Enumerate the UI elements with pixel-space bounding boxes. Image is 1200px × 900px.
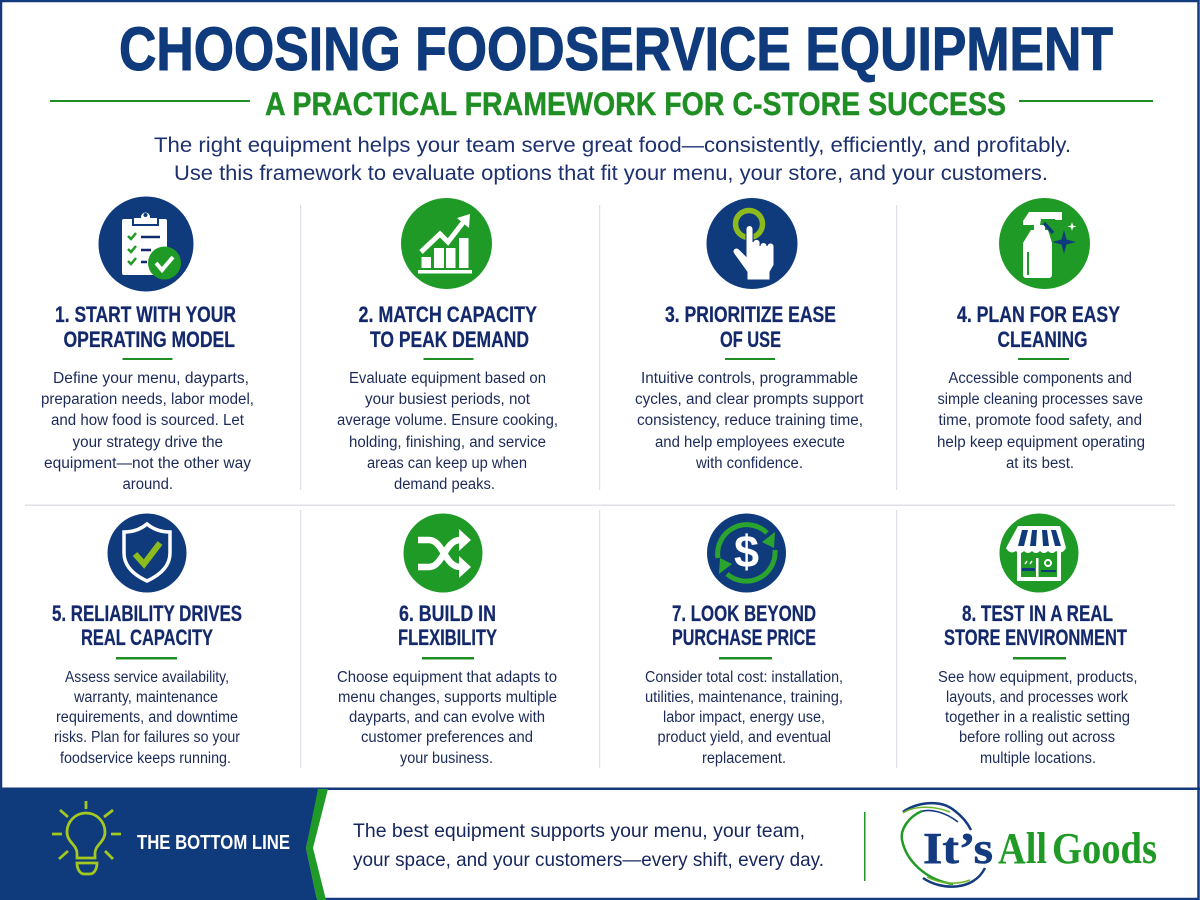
body text: requirements, and downtime	[56, 709, 238, 726]
heading: 3. PRIORITIZE EASE	[665, 302, 836, 327]
body text: replacement.	[702, 750, 786, 767]
body text: your strategy drive the	[72, 434, 223, 451]
panel: step 6	[337, 514, 557, 767]
panel: step 4	[937, 198, 1145, 472]
heading: 1. START WITH YOUR	[55, 302, 236, 327]
heading: PURCHASE PRICE	[672, 625, 816, 650]
heading: 6. BUILD IN	[399, 601, 496, 626]
panel: step 2	[337, 198, 558, 493]
icon: storefront	[1000, 514, 1078, 592]
body text: layouts, and processes work	[946, 689, 1128, 706]
body text	[635, 370, 864, 472]
logo: It’s	[923, 824, 993, 873]
icon: spray bottle	[999, 198, 1090, 289]
intro text: The right equipment helps your team serve great food—consistently, efficiently, and profitably.	[154, 133, 1071, 157]
body text: Assess service availability,	[65, 669, 229, 686]
body text: simple cleaning processes save	[938, 391, 1143, 408]
icon: dollar cycle: $	[734, 526, 759, 577]
heading: REAL CAPACITY	[81, 625, 213, 650]
body text: demand peaks.	[394, 476, 495, 493]
subtitle with side rules: A PRACTICAL FRAMEWORK FOR C-STORE SUCCESS	[265, 86, 1006, 122]
body text: and help employees execute	[655, 434, 845, 451]
icon: touch hand	[706, 198, 798, 289]
body text: your busiest periods, not	[365, 391, 531, 408]
heading	[398, 601, 497, 660]
intro text: Use this framework to evaluate options that fit your menu, your store, and your customers.	[174, 161, 1048, 185]
heading: TO PEAK DEMAND	[370, 327, 529, 352]
navy banner	[0, 789, 319, 900]
body text: help keep equipment operating	[937, 434, 1145, 451]
heading	[944, 601, 1127, 660]
body text: risks. Plan for failures so your	[54, 729, 240, 746]
body text: multiple locations.	[980, 750, 1096, 767]
heading: OPERATING MODEL	[64, 327, 235, 352]
body text: Intuitive controls, programmable	[641, 370, 858, 387]
panel: step 1	[41, 196, 254, 493]
body text: your business.	[400, 750, 493, 767]
body text: cycles, and clear prompts support	[635, 391, 864, 408]
body text: time, promote food safety, and	[938, 412, 1142, 429]
body text: Choose equipment that adapts to	[337, 669, 557, 686]
body text: dayparts, and can evolve with	[349, 709, 545, 726]
body text: Accessible components and	[948, 370, 1132, 387]
icon: shield	[108, 514, 186, 592]
heading	[672, 601, 816, 660]
body text	[41, 370, 254, 493]
icon: light bulb	[52, 801, 121, 874]
body text: together in a realistic setting	[945, 709, 1130, 726]
label: THE BOTTOM LINE	[137, 831, 290, 854]
panel: step 8	[938, 514, 1138, 767]
logo	[902, 803, 1157, 887]
body text	[937, 370, 1145, 472]
body text: product yield, and eventual	[658, 729, 831, 746]
heading	[957, 302, 1120, 360]
takeaway text: The best equipment supports your menu, your team,	[353, 820, 805, 842]
body text: at its best.	[1006, 455, 1074, 472]
body text: Consider total cost: installation,	[645, 669, 843, 686]
panel: bottom line footer	[0, 788, 1200, 900]
body text	[337, 370, 558, 493]
body text: labor impact, energy use,	[663, 709, 825, 726]
heading: FLEXIBILITY	[398, 625, 497, 650]
body text: around.	[122, 476, 173, 493]
body text: consistency, reduce training time,	[637, 412, 863, 429]
body text: before rolling out across	[959, 729, 1115, 746]
heading	[358, 302, 537, 360]
body text	[938, 669, 1138, 767]
body text: foodservice keeps running.	[60, 750, 231, 767]
icon: dollar cycle	[707, 514, 786, 592]
body text: warranty, maintenance	[73, 689, 218, 706]
heading	[55, 302, 236, 360]
body text: holding, finishing, and service	[349, 434, 546, 451]
body text: preparation needs, labor model,	[41, 391, 254, 408]
logo: Goods	[1052, 824, 1157, 873]
heading: CLEANING	[998, 327, 1088, 352]
intro text	[154, 133, 1071, 185]
body text	[645, 669, 843, 767]
body text: Evaluate equipment based on	[349, 370, 546, 387]
heading: 7. LOOK BEYOND	[672, 601, 816, 626]
body text	[337, 669, 557, 767]
body text: Define your menu, dayparts,	[53, 370, 249, 387]
panel: step 3	[635, 198, 864, 472]
body text: and how food is sourced. Let	[51, 412, 245, 429]
heading: 4. PLAN FOR EASY	[957, 302, 1120, 327]
body text: menu changes, supports multiple	[338, 689, 557, 706]
heading: 5. RELIABILITY DRIVES	[52, 601, 242, 626]
body text: with confidence.	[695, 455, 803, 472]
panel: step 7	[645, 514, 843, 767]
heading: 8. TEST IN A REAL	[962, 601, 1113, 626]
body text: utilities, maintenance, training,	[645, 689, 843, 706]
body text: areas can keep up when	[367, 455, 527, 472]
heading	[52, 601, 242, 660]
body text: customer preferences and	[361, 729, 533, 746]
icon: growth chart	[401, 198, 492, 289]
heading: 2. MATCH CAPACITY	[358, 302, 537, 327]
icon: shuffle arrows	[404, 514, 482, 592]
logo: All	[998, 824, 1047, 873]
green chevron	[306, 789, 328, 900]
body text: See how equipment, products,	[938, 669, 1138, 686]
heading: OF USE	[720, 327, 781, 352]
body text: equipment—not the other way	[44, 455, 251, 472]
heading: STORE ENVIRONMENT	[944, 625, 1127, 650]
icon: clipboard checklist	[98, 196, 194, 292]
body text: average volume. Ensure cooking,	[337, 412, 558, 429]
takeaway text: your space, and your customers—every shift, every day.	[353, 849, 824, 871]
body text	[54, 669, 240, 767]
takeaway text	[353, 820, 824, 871]
heading	[665, 302, 836, 360]
panel: step 5	[52, 514, 242, 767]
